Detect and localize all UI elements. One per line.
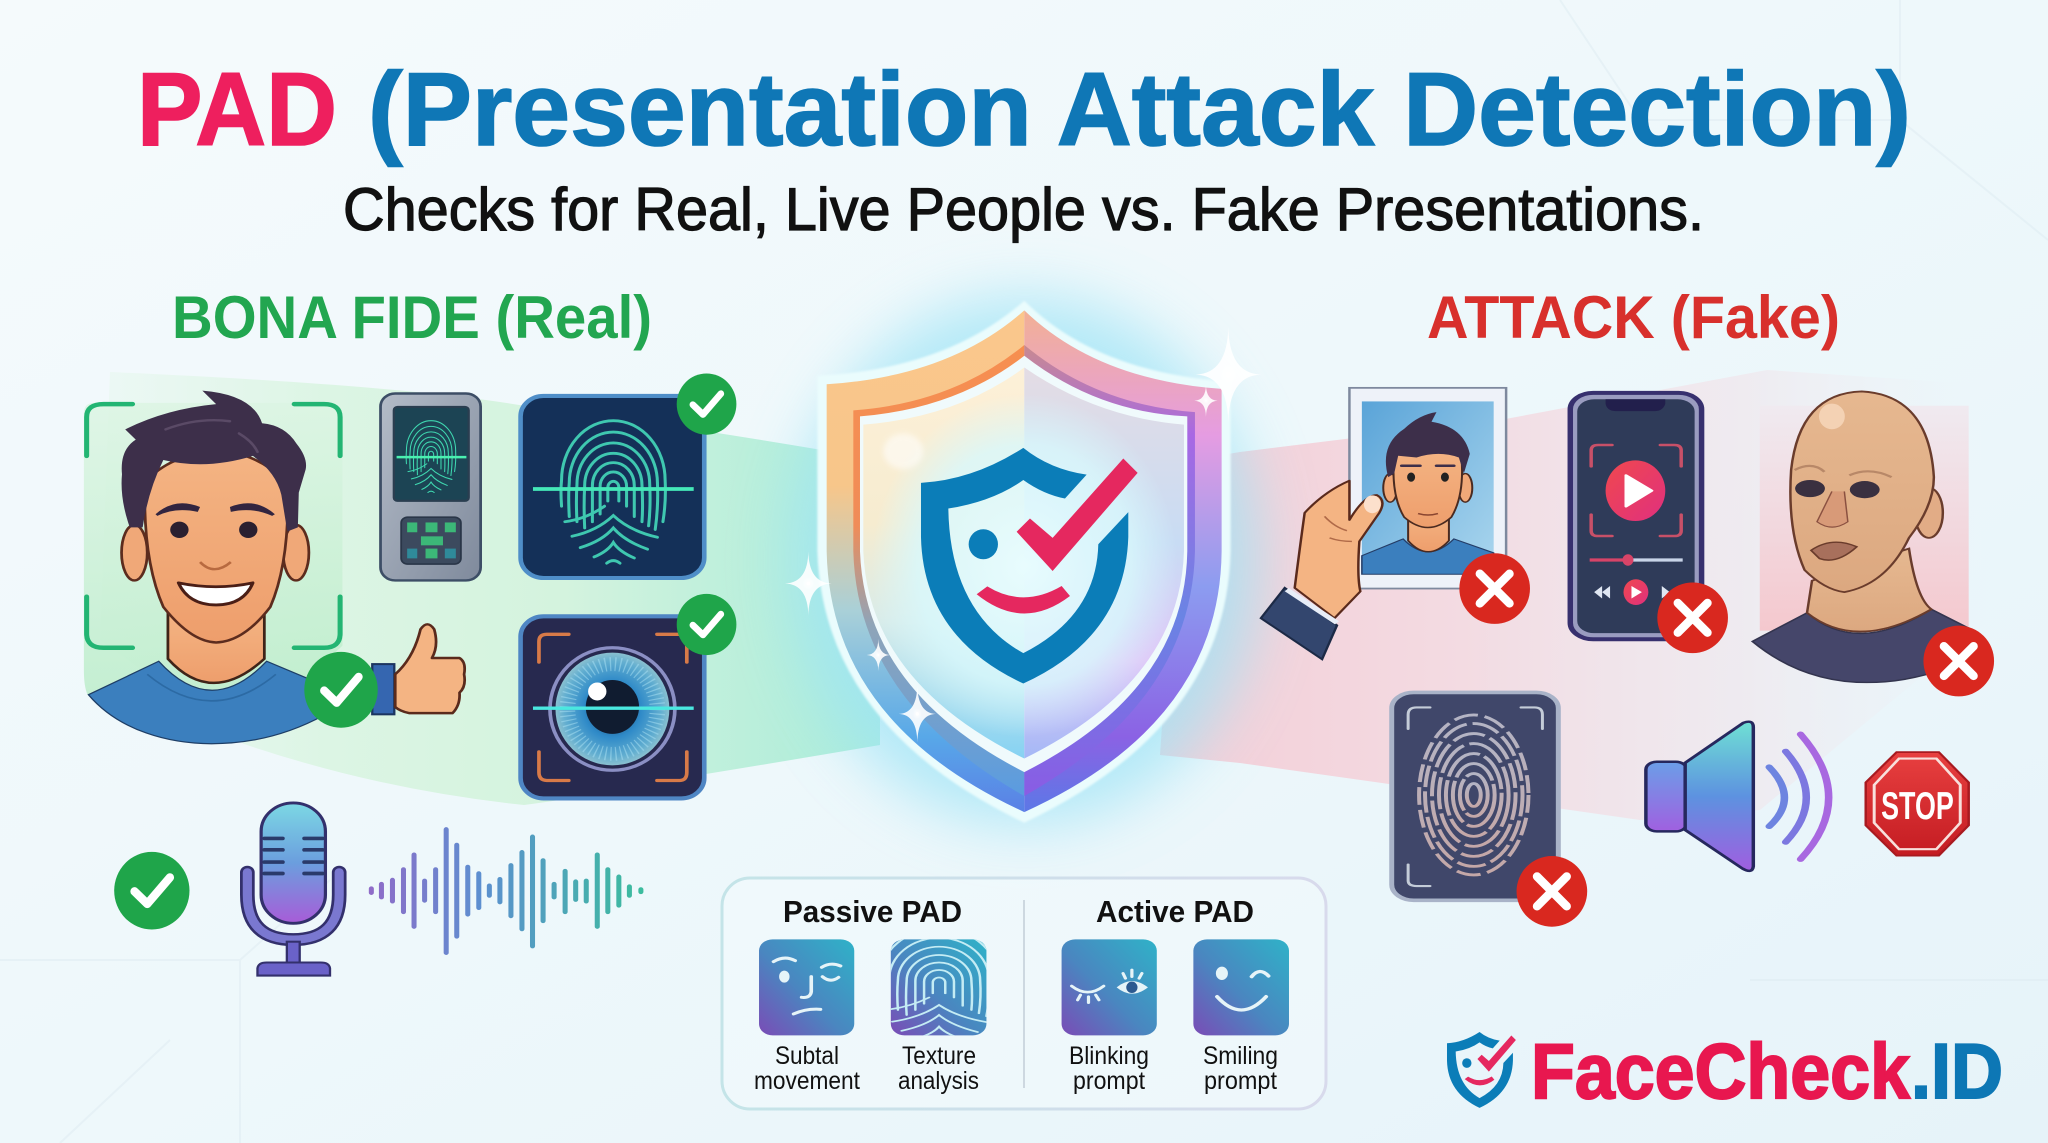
label: subtal movement (754, 1042, 860, 1095)
shield pale panel (860, 356, 1187, 772)
icon: smiling prompt (1193, 939, 1289, 1035)
icon: texture analysis (890, 939, 986, 1036)
label: smiling prompt: Smiling (1203, 1042, 1278, 1070)
green band (100, 372, 880, 805)
check: iris (677, 594, 736, 655)
subtitle: Checks for Real, Live People vs. Fake Presentations. (343, 176, 1704, 243)
sparkles (785, 326, 1261, 743)
label: smiling prompt: prompt (1204, 1067, 1277, 1095)
heading: active: Active PAD (1096, 894, 1254, 929)
voice waveform (371, 829, 641, 953)
central shield (785, 301, 1261, 823)
logo: FaceCheck.ID (1447, 1027, 2003, 1115)
microphone (247, 803, 339, 976)
label: texture analysis (898, 1042, 979, 1095)
label: blinking prompt: Blinking (1069, 1042, 1149, 1070)
cross: photo (1459, 553, 1530, 624)
icon: blinking prompt (1062, 939, 1157, 1035)
stop sign (1866, 752, 1969, 856)
label: texture analysis: Texture (902, 1042, 976, 1070)
panel: passive and active PAD (722, 878, 1326, 1109)
icon: subtle movement (759, 939, 854, 1035)
check: fingerprint (677, 373, 736, 435)
label: subtal movement: movement (754, 1067, 860, 1095)
shield glow (790, 295, 1260, 825)
synthetic voice speaker (1646, 722, 1829, 871)
logo wordmark: .ID (1911, 1027, 2003, 1115)
heading: passive: Passive PAD (783, 894, 962, 929)
cross: phone (1657, 582, 1728, 653)
hand holding photo (1261, 481, 1382, 659)
label: subtal movement: Subtal (775, 1042, 839, 1070)
printed photo attack (1349, 388, 1506, 589)
cross: fake fingerprint (1517, 856, 1587, 927)
silicone mask (1752, 391, 1981, 682)
shield inner band (853, 345, 1195, 796)
title: PAD (137, 52, 337, 168)
label: texture analysis: analysis (898, 1067, 979, 1095)
check: voice (114, 852, 189, 929)
red band (1160, 370, 1990, 820)
heading: bona fide: BONA FIDE (Real) (172, 284, 652, 351)
label: smiling prompt (1203, 1042, 1278, 1095)
title: (Presentation Attack Detection) (368, 52, 1911, 168)
shield gradient ring (827, 310, 1222, 812)
thumbs-up hand (372, 624, 465, 714)
emblem: shield with smile and check (921, 448, 1138, 684)
fingerprint scanner device (381, 393, 481, 580)
label: blinking prompt: prompt (1073, 1067, 1145, 1095)
heading: attack: ATTACK (Fake) (1427, 284, 1840, 351)
iris scan tile (521, 616, 704, 798)
face portrait (84, 391, 342, 744)
panel: attack examples (1261, 388, 1994, 927)
logo wordmark: FaceCheck (1531, 1027, 1911, 1115)
fake fingerprint (1392, 692, 1558, 900)
shield outer rim (817, 301, 1231, 823)
phone video replay (1570, 393, 1702, 639)
panel: bona fide biometrics (84, 373, 736, 976)
check: face (304, 652, 378, 728)
fingerprint tile (521, 396, 704, 578)
cross: mask (1923, 626, 1994, 696)
logo shield (1447, 1032, 1516, 1108)
stop sign: STOP (1881, 785, 1954, 827)
label: blinking prompt (1069, 1042, 1149, 1095)
